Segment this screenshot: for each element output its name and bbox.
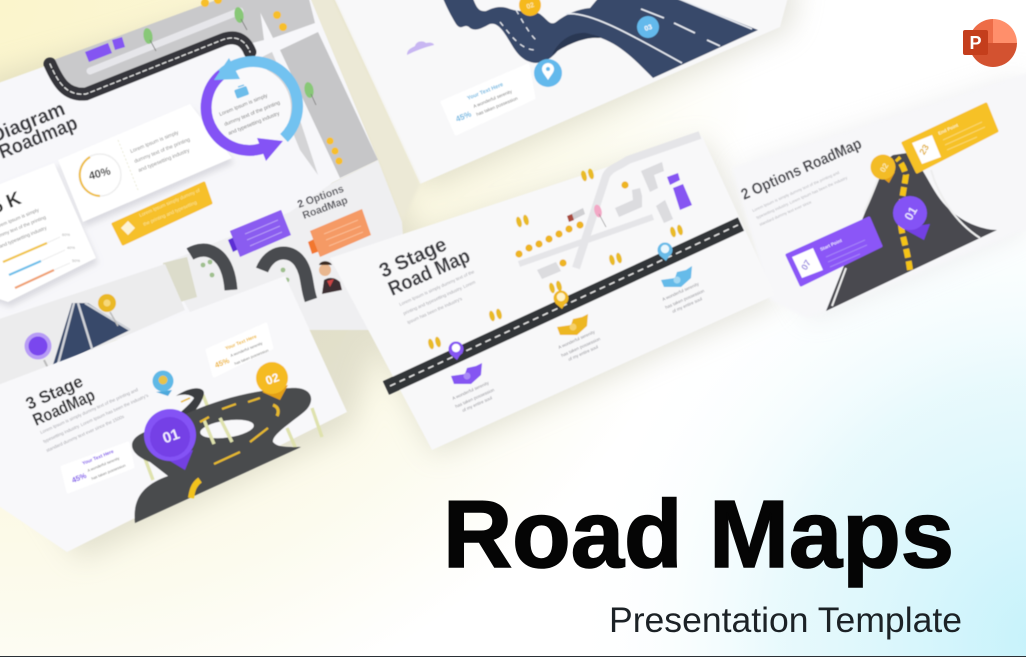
- description text: typesetting industry. Lorem Ipsum has been the industry: [755, 175, 848, 220]
- pin: 02: [870, 154, 896, 183]
- pin: 02: [256, 362, 288, 400]
- slide: top navy road: [330, 0, 790, 184]
- title: 3 stage roadmap: [23, 372, 98, 430]
- card: your text here: has taken possession: [476, 96, 519, 117]
- yellow tree pairs: [427, 168, 684, 350]
- pin: 01: [144, 409, 196, 470]
- card: 16 K with bars: 40%: [67, 245, 75, 250]
- ribbon: blue: [661, 266, 692, 287]
- truck: [567, 208, 585, 222]
- description text: standard dummy text ever since: [758, 199, 813, 227]
- title: 3 stage road map: Road Map: [385, 245, 474, 301]
- pin: 02: 02: [878, 161, 891, 174]
- caption: stage 3: [661, 281, 705, 314]
- description text: [398, 269, 476, 325]
- card: your text here: [442, 65, 534, 134]
- pin: 02: 02: [264, 370, 281, 388]
- card: yellow 23: [903, 104, 997, 172]
- icon: trees: [142, 6, 316, 105]
- card: your text here: A wonderful serenity: [473, 89, 513, 109]
- title: 2 options roadmap: 2 Options RoadMap: [739, 135, 864, 204]
- card: yellow 23: End Point: [937, 122, 959, 136]
- title: road maps: Road Maps: [443, 481, 954, 588]
- slide: diagram roadmap: [0, 0, 378, 340]
- icon: briefcase: [234, 85, 249, 99]
- pin: blue number: [637, 16, 659, 38]
- yellow callout button: Lorem Ipsum simply dummy of: [138, 188, 202, 219]
- caption: stage 1: of my entire soul: [461, 395, 493, 413]
- slide fragment with navy road and pins: [0, 264, 185, 395]
- purple buildings: [667, 173, 692, 210]
- ribbon: purple: [451, 363, 482, 384]
- winding roads: [190, 250, 311, 300]
- card: yellow 45 percent: A wonderful serenity: [230, 341, 263, 358]
- card: purple 45 percent: A wonderful serenity: [87, 456, 120, 473]
- slide: 3 stage road map center: [330, 135, 775, 450]
- card: purple 45 percent: 45%: [70, 471, 88, 485]
- caption: stage 2: has taken possession: [560, 336, 601, 358]
- icon: PowerPoint logo: [963, 19, 1017, 67]
- caption: stage 1: A wonderful serenity: [451, 380, 490, 401]
- slide shadows: [0, 0, 800, 560]
- card: your text here: Your Text Here: [467, 82, 504, 102]
- card: purple 07: 07: [799, 258, 813, 272]
- winding dark road: [132, 388, 311, 523]
- cycle arrows diagram: [206, 58, 298, 161]
- card shadows: [0, 109, 234, 307]
- tree dots: [201, 260, 289, 282]
- pin: 01: 01: [901, 204, 920, 223]
- description text: Lorem Ipsum is simply dummy text of the: [398, 269, 476, 307]
- purple flag: [228, 210, 291, 257]
- card: 40 percent: Lorem Ipsum is simply: [130, 130, 180, 155]
- card: 16 K with bars: 50%: [72, 258, 80, 263]
- pin: blue: [658, 242, 672, 261]
- title: 3 stage roadmap: 3 Stage: [23, 372, 86, 414]
- right slide shadow: [735, 75, 1026, 320]
- caption: stage 3: of my entire soul: [671, 296, 703, 314]
- description text: standard dummy text ever since the 1500s: [45, 414, 126, 453]
- slide: 2 options roadmap right: [732, 72, 1026, 318]
- navy winding road: [442, 0, 758, 78]
- caption: stage 3: A wonderful serenity: [661, 281, 700, 302]
- description text: typesetting industry. Lorem Ipsum has been the industry's: [42, 392, 150, 444]
- card: your text here: 45%: [454, 110, 473, 124]
- card: yellow 45 percent: has taken possession: [234, 349, 269, 366]
- straight road: [386, 224, 741, 388]
- card: 16 K with bars: and typesetting industry: [0, 225, 48, 250]
- cycle arrows diagram: dummy text of the printing: [224, 100, 281, 128]
- map streets: [519, 135, 700, 268]
- orange flag: [308, 209, 371, 257]
- description text: Ipsum has been the industry's: [406, 296, 464, 325]
- icon: businessman: [319, 261, 342, 294]
- title: 3 stage road map: 3 Stage: [376, 234, 450, 283]
- pin: blue with bulb: [152, 370, 174, 396]
- card: yellow 45 percent: 45%: [213, 356, 231, 370]
- description text: printing and typesetting industry. Lorem: [402, 279, 476, 316]
- icon: blue location pin: [534, 59, 562, 87]
- caption: stage 3: has taken possession: [664, 288, 705, 310]
- title: 3 stage roadmap: RoadMap: [30, 385, 98, 430]
- pin: 01: 01: [160, 426, 182, 447]
- heading: 2 options roadmap: RoadMap: [301, 194, 349, 222]
- icon: purple cloud: [407, 41, 434, 55]
- pin: yellow: 02: [526, 2, 535, 11]
- pin: purple: [448, 342, 464, 360]
- description text: Lorem Ipsum is simply dummy text of the printing and: [751, 170, 840, 213]
- heading: 2 options roadmap: 2 Options: [296, 183, 346, 211]
- card: yellow 45 percent: Your Text Here: [225, 334, 258, 352]
- card: 40 percent: [58, 104, 232, 222]
- card: purple 45 percent: Your Text Here: [82, 449, 115, 467]
- cycle arrows diagram: and typesetting industry: [228, 111, 281, 137]
- icon: PowerPoint logo: P: [969, 33, 982, 53]
- pin: blue number: 03: [644, 24, 653, 33]
- bottom rule: [0, 656, 1026, 657]
- ribbon: yellow: [557, 314, 588, 335]
- pink tree: [593, 204, 606, 227]
- road perspective: [826, 153, 997, 311]
- card: 40 percent: and typesetting industry: [138, 148, 191, 174]
- card: yellow 23: 23: [917, 143, 931, 156]
- description text: Lorem Ipsum is simply dummy text of the printing and: [39, 387, 139, 435]
- map blocks: [48, 0, 378, 178]
- pin: yellow: [554, 290, 568, 309]
- heading: 2 options roadmap: [296, 183, 349, 222]
- pin: yellow: [519, 0, 541, 16]
- winding road with dashes: [50, 38, 250, 94]
- pin: 01: [893, 196, 930, 240]
- card: purple 07: [787, 218, 881, 285]
- icon: purple buildings: [85, 37, 125, 62]
- caption: stage 2: [557, 329, 601, 362]
- cycle arrows diagram: Lorem Ipsum is simply: [219, 93, 269, 118]
- slide: 3 stage roadmap: [0, 276, 347, 552]
- card: purple 07: Start Point: [819, 238, 843, 252]
- road supports: [140, 395, 322, 480]
- card: purple 45 percent: [62, 443, 133, 492]
- card: 40 percent: dummy text of the printing: [134, 137, 191, 165]
- card: 16 K with bars: 60%: [62, 232, 70, 237]
- yellow callout button: [113, 183, 211, 244]
- beige gap between slides: [307, 0, 420, 222]
- yellow map dots: [201, 0, 343, 165]
- card: 16 K with bars: [0, 163, 96, 302]
- card: 40 percent: 40%: [88, 165, 112, 183]
- caption: stage 2: of my entire soul: [567, 344, 599, 362]
- card: purple 45 percent: has taken possession: [91, 464, 126, 481]
- yellow map dots: [515, 181, 629, 267]
- slide piece: two options behind: [0, 160, 410, 395]
- subtitle: presentation template: Presentation Template: [609, 601, 962, 640]
- caption: stage 1: has taken possession: [454, 387, 495, 409]
- caption: stage 1: [451, 380, 495, 413]
- map buildings: [537, 162, 673, 279]
- yellow callout button: the printing and typesetting: [142, 200, 198, 228]
- card: yellow 45 percent: [207, 324, 272, 376]
- caption: stage 2: A wonderful serenity: [557, 329, 596, 350]
